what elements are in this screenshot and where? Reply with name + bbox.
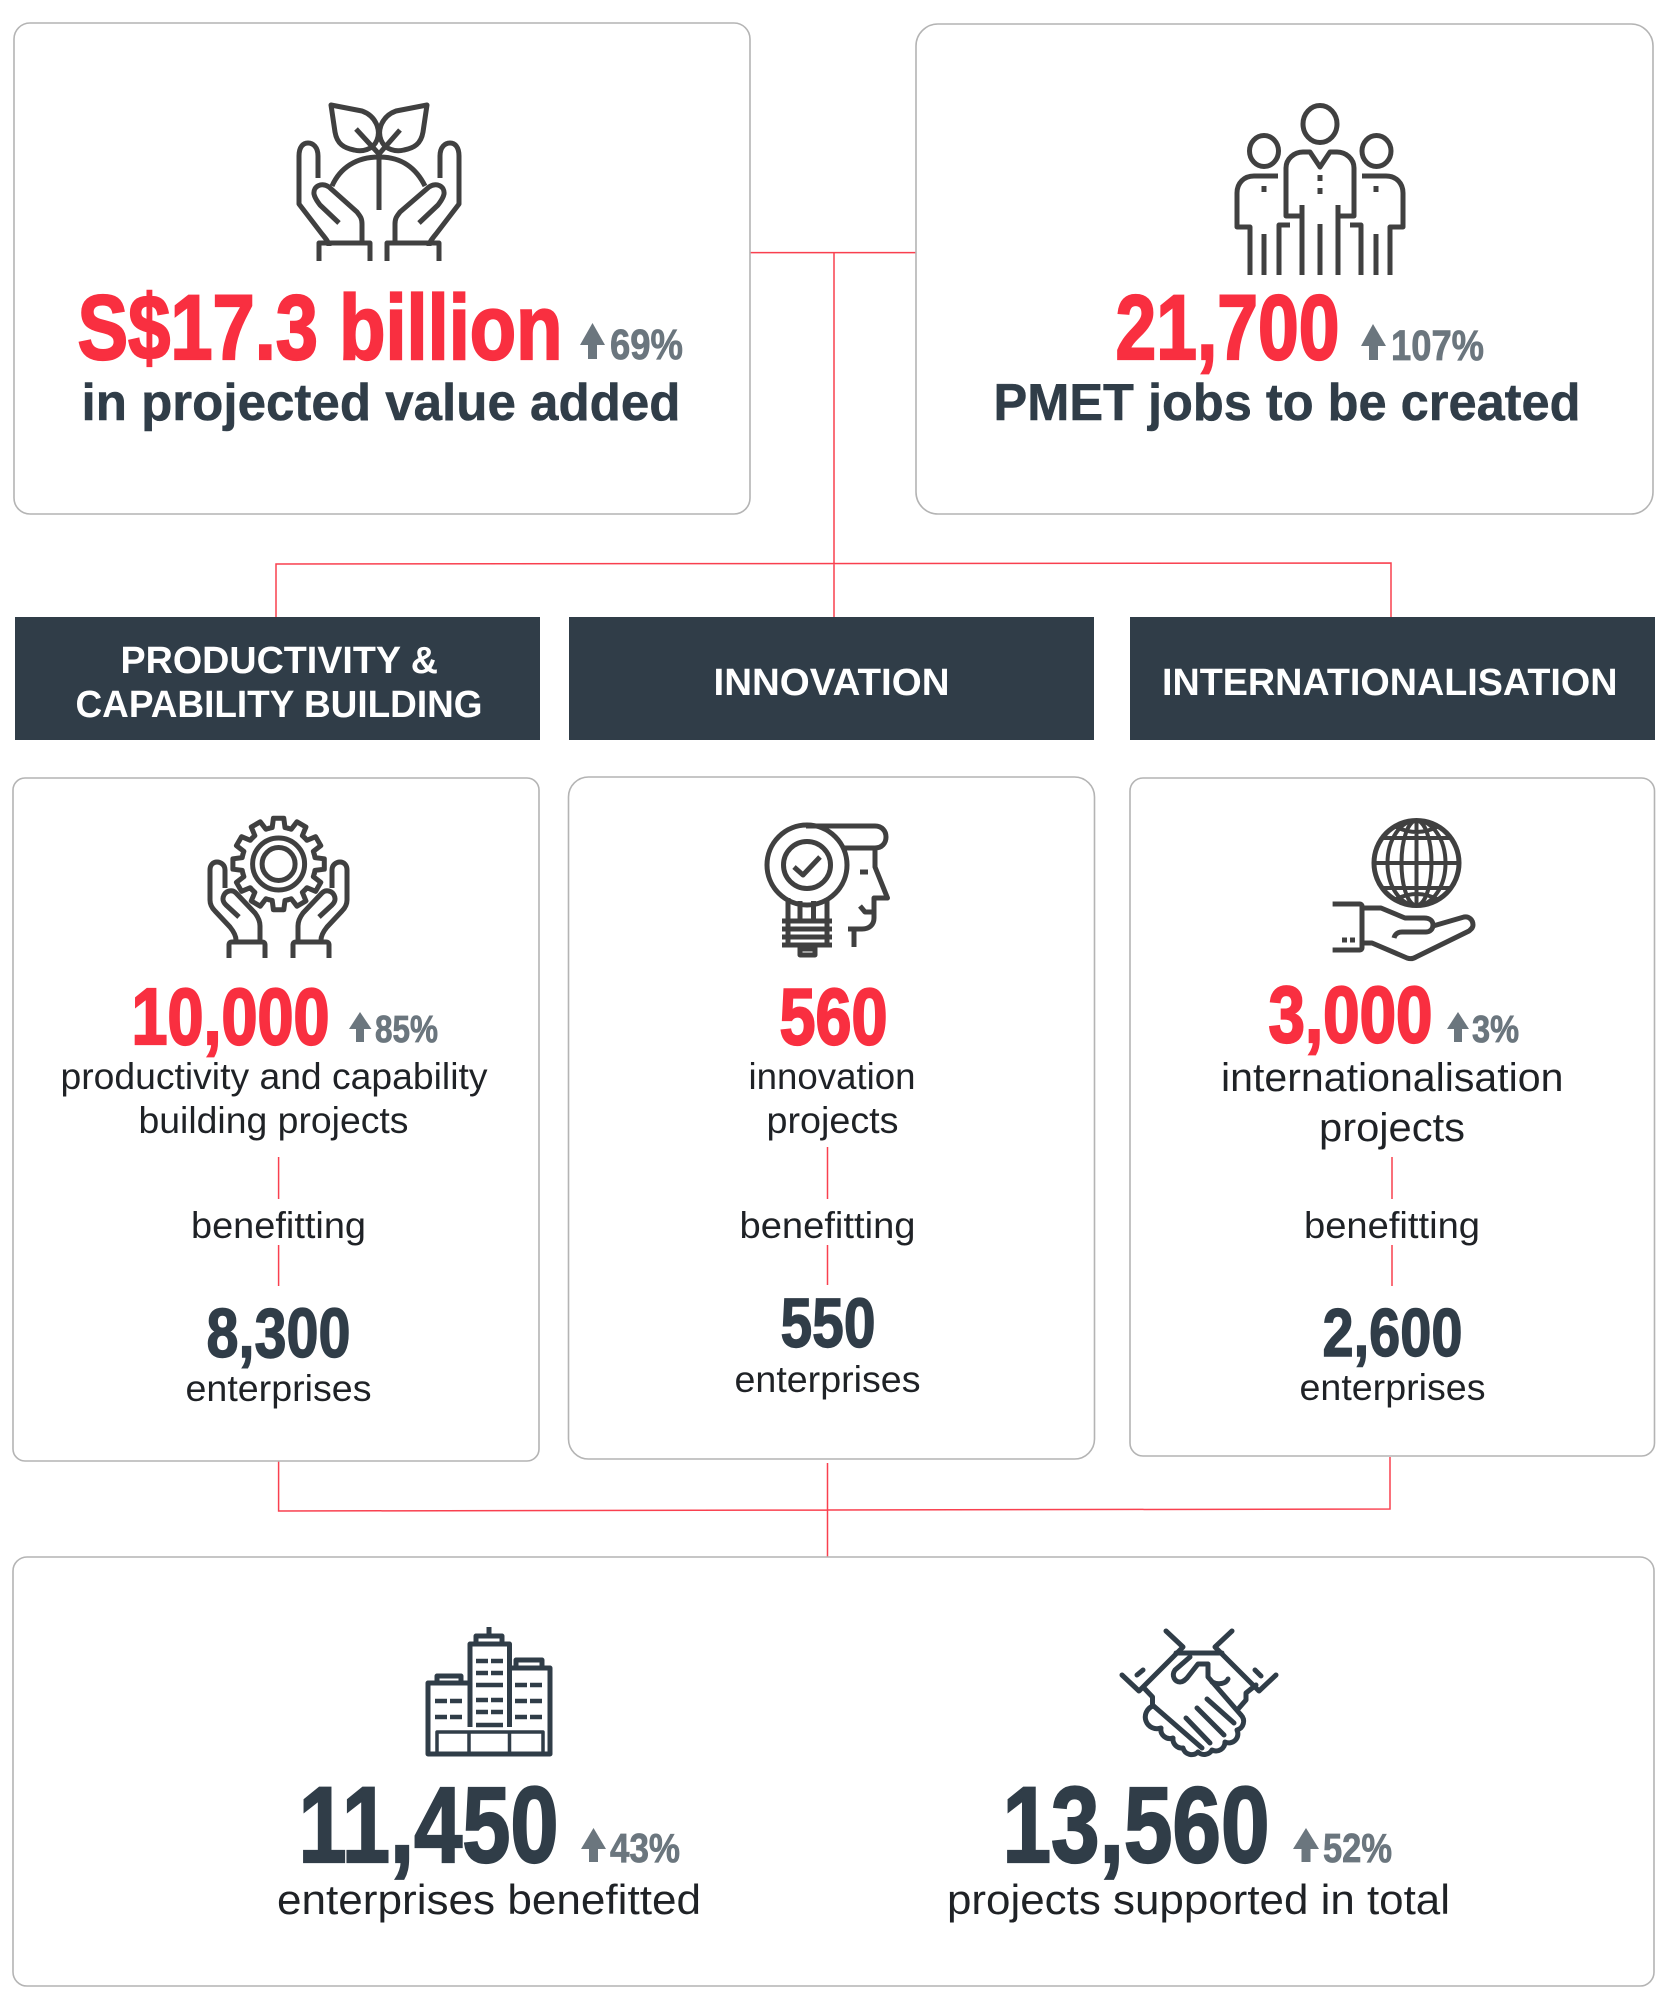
panel: internationalisation [1130,778,1654,1456]
arrow: up 107% [1361,324,1386,360]
heading: productivity and capability building: CAPABILITY BUILDING [76,684,482,726]
description: internationalisation projects [1221,1056,1564,1150]
change: 3%: 3% [1472,1009,1519,1051]
description: productivity and capability building projects: building projects [138,1100,408,1141]
arrow: up 69% [580,323,605,359]
panel: innovation [568,777,1094,1459]
panel: projected value added [14,23,750,514]
arrow: up 85% [349,1012,372,1042]
panel: productivity and capability building [13,778,539,1461]
caption: PMET jobs to be created: PMET jobs to be created [994,374,1580,432]
value: 10,000: 10,000 [132,972,330,1061]
arrow: up 43% [581,1828,606,1862]
heading: innovation: INNOVATION [714,662,950,704]
value: 550: 550 [780,1284,876,1362]
icon: hand holding globe [1333,820,1473,959]
heading: productivity and capability building: PRODUCTIVITY & [120,640,438,682]
heading: internationalisation: INTERNATIONALISATION [1162,662,1618,704]
label: benefitting: benefitting [740,1205,916,1246]
label: enterprises: enterprises [186,1368,372,1409]
description: productivity and capability building projects: productivity and capability [60,1056,488,1097]
arrow: up 52% [1293,1828,1319,1862]
arrow: up 3% [1447,1012,1469,1042]
label: enterprises: enterprises [1300,1367,1486,1408]
value: 13,560: 13,560 [1002,1764,1270,1885]
heading: productivity and capability building [15,617,540,740]
panel: totals [13,1557,1654,1986]
value: 8,300: 8,300 [206,1294,350,1372]
heading: internationalisation [1130,617,1655,740]
change: 43%: 43% [610,1825,680,1871]
caption: enterprises benefitted: enterprises benefitted [277,1876,701,1923]
description: internationalisation projects: internationalisation [1221,1056,1564,1100]
description: internationalisation projects: projects [1319,1106,1465,1150]
label: enterprises: enterprises [734,1359,920,1400]
caption: projects supported in total: projects supported in total [947,1876,1450,1923]
icon: office buildings [428,1627,550,1754]
icon: hands holding plant [299,105,459,261]
value: S$17.3 billion: S$17.3 billion [78,277,562,379]
label: benefitting: benefitting [191,1205,366,1246]
description: innovation projects: innovation [748,1056,916,1097]
change: 69%: 69% [610,321,683,369]
change: 107%: 107% [1391,322,1484,370]
value: 560: 560 [780,972,888,1061]
description: innovation projects [748,1056,916,1141]
heading: innovation [569,617,1094,740]
description: innovation projects: projects [766,1100,898,1141]
change: 52%: 52% [1323,1825,1392,1871]
caption: in projected value added: in projected value added [82,374,680,432]
icon: handshake [1122,1631,1276,1755]
value: 2,600: 2,600 [1322,1295,1462,1371]
icon: lightbulb and head [767,825,888,955]
label: benefitting: benefitting [1304,1205,1480,1246]
change: 85%: 85% [375,1009,438,1051]
description: productivity and capability building projects [60,1056,488,1141]
panel: PMET jobs [916,24,1653,514]
value: 21,700: 21,700 [1116,277,1340,379]
value: 11,450: 11,450 [298,1764,558,1885]
icon: hands holding gear [210,818,347,958]
value: 3,000: 3,000 [1268,970,1432,1059]
icon: three people [1237,106,1403,275]
